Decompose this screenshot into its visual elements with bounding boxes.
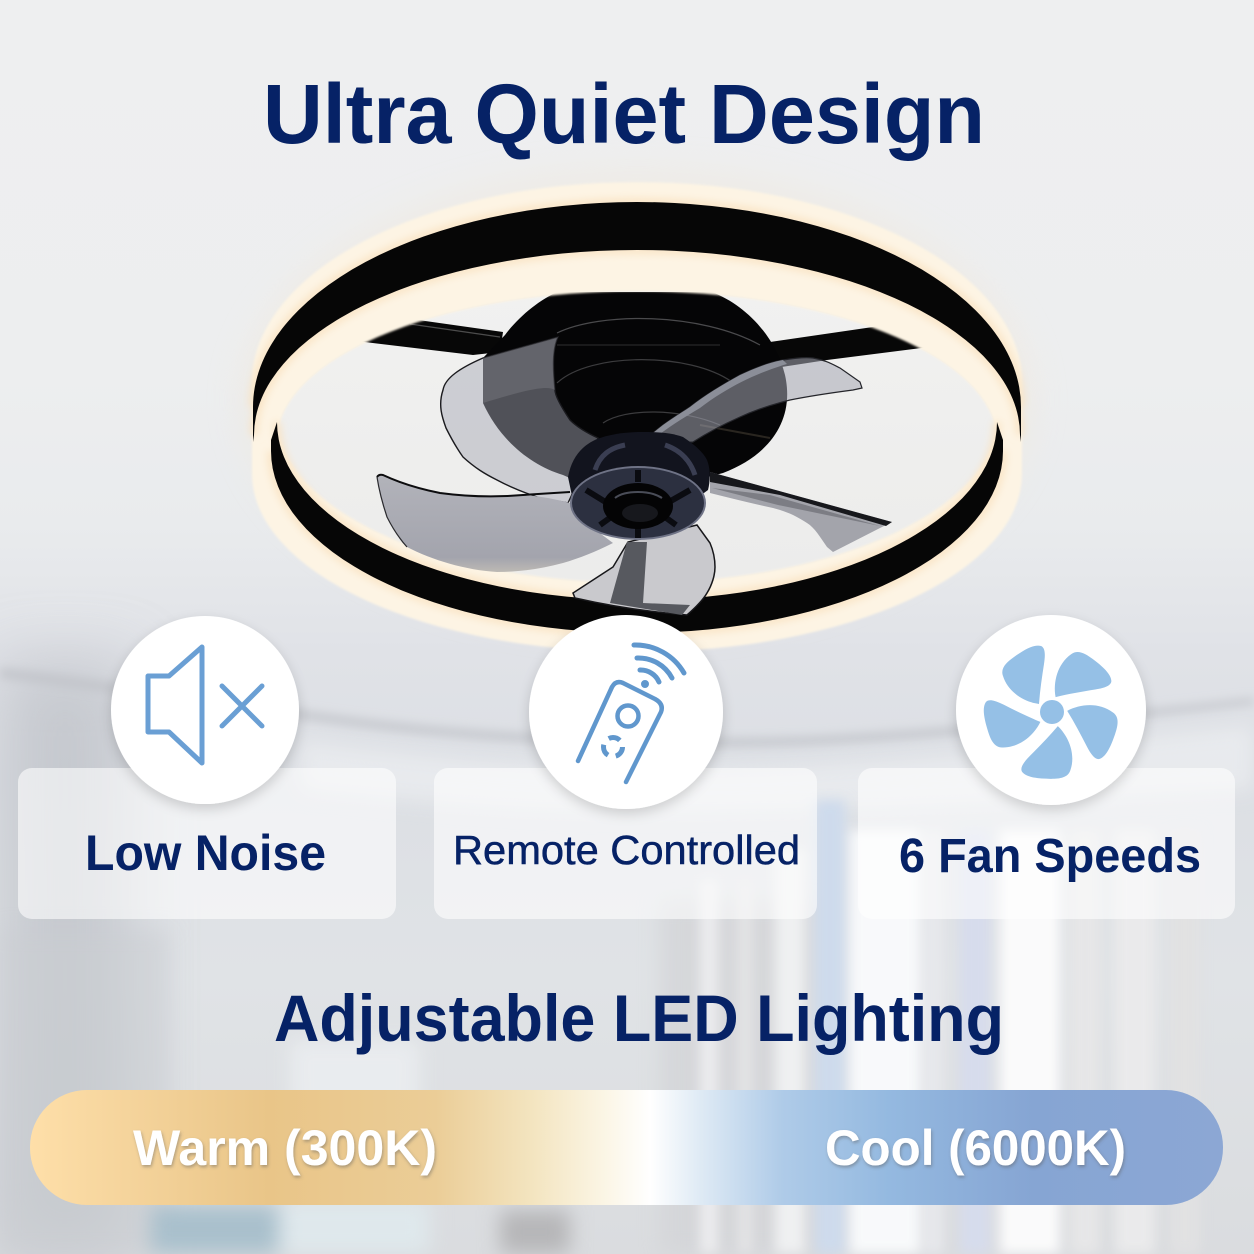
card bbox=[434, 768, 817, 919]
motor base bbox=[483, 292, 787, 500]
label: 6 Fan Speeds bbox=[899, 830, 1201, 883]
icon: remote with signal bbox=[578, 645, 684, 782]
card bbox=[18, 768, 396, 919]
label: Low Noise bbox=[85, 825, 326, 881]
card bbox=[858, 768, 1235, 919]
title: Ultra Quiet Design bbox=[263, 67, 985, 161]
icon: muted speaker bbox=[148, 647, 262, 763]
black lower band bbox=[271, 422, 1003, 633]
panel: low noise bbox=[18, 616, 396, 919]
icon circle bbox=[956, 615, 1146, 805]
motor hub bbox=[568, 432, 710, 540]
icon circle bbox=[111, 616, 299, 804]
soft halo around ring bbox=[237, 165, 1037, 635]
ceiling seen through ring bbox=[278, 291, 996, 583]
icon: fan bbox=[973, 644, 1131, 795]
blade right bbox=[710, 472, 892, 552]
panel: remote controlled bbox=[434, 615, 817, 919]
icon circle bbox=[529, 615, 723, 809]
blade upper right bbox=[640, 358, 862, 445]
heading: adjustable lighting: Adjustable LED Lighting bbox=[274, 981, 1004, 1055]
blade upper left bbox=[441, 337, 598, 503]
blade bottom bbox=[573, 525, 715, 615]
cool label: Cool (6000K) bbox=[825, 1120, 1126, 1176]
colour temperature bar bbox=[30, 1090, 1223, 1205]
label: Remote Controlled bbox=[453, 827, 800, 873]
ceiling fan product bbox=[237, 165, 1037, 652]
warm glow next to black bands bbox=[253, 202, 1021, 633]
black upper band bbox=[253, 202, 1021, 442]
gradient pill bbox=[30, 1090, 1223, 1205]
warm label: Warm (300K) bbox=[133, 1120, 437, 1176]
mount arms bbox=[348, 316, 945, 368]
blade lower left bbox=[377, 475, 613, 572]
glow ring bbox=[252, 182, 1022, 652]
panel: fan speeds bbox=[858, 615, 1235, 919]
